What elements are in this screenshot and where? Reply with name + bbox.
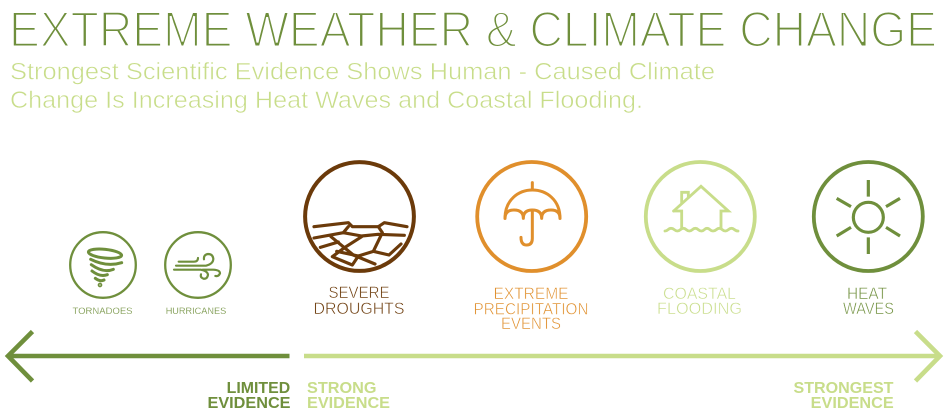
- label: heat waves: WAVES: [843, 299, 894, 318]
- label: heat waves: [843, 284, 894, 318]
- label: tornadoes: TORNADOES: [72, 306, 132, 317]
- icon: hurricane wind: [165, 232, 231, 298]
- label: heat waves: HEAT: [847, 284, 887, 303]
- hurricanes item: [165, 232, 231, 317]
- heat waves item: [814, 162, 923, 318]
- severe droughts item: [305, 162, 414, 318]
- label: extreme precipitation events: PRECIPITATION: [474, 300, 588, 318]
- extreme precipitation item: [474, 162, 588, 333]
- subtitle: Change Is Increasing Heat Waves and Coastal Flooding.: [10, 87, 643, 114]
- label: strongest evidence: EVIDENCE: [811, 395, 894, 412]
- label: limited evidence: LIMITED: [227, 380, 290, 397]
- label: strong evidence: [307, 380, 390, 412]
- icon: umbrella: [477, 162, 586, 271]
- label: strong evidence: STRONG: [307, 380, 376, 397]
- icon: cracked earth: [305, 162, 414, 271]
- label: coastal flooding: FLOODING: [657, 299, 742, 318]
- label: coastal flooding: [657, 284, 742, 318]
- label: strong evidence: EVIDENCE: [307, 395, 390, 412]
- label: hurricanes: HURRICANES: [166, 306, 226, 317]
- label: extreme precipitation events: EXTREME: [494, 284, 568, 303]
- icon: flooded house: [646, 162, 755, 271]
- subtitle: [10, 58, 715, 114]
- label: limited evidence: EVIDENCE: [208, 395, 290, 412]
- icon: sun: [814, 162, 923, 271]
- label: strongest evidence: [794, 380, 894, 412]
- label: extreme precipitation events: [474, 284, 588, 333]
- label: coastal flooding: COASTAL: [663, 284, 736, 303]
- icon: tornado: [70, 232, 136, 298]
- label: extreme precipitation events: EVENTS: [501, 314, 561, 333]
- tornadoes item: [70, 232, 136, 317]
- subtitle: Strongest Scientific Evidence Shows Human - Caused Climate: [10, 58, 715, 86]
- coastal flooding item: [646, 162, 755, 318]
- label: limited evidence: [208, 380, 290, 412]
- label: strongest evidence: STRONGEST: [794, 380, 894, 397]
- arrow: strong to strongest evidence: [304, 332, 940, 381]
- arrow: limited evidence: [8, 332, 290, 381]
- label: severe droughts: DROUGHTS: [314, 299, 404, 318]
- label: severe droughts: SEVERE: [328, 283, 390, 302]
- label: severe droughts: [314, 283, 404, 318]
